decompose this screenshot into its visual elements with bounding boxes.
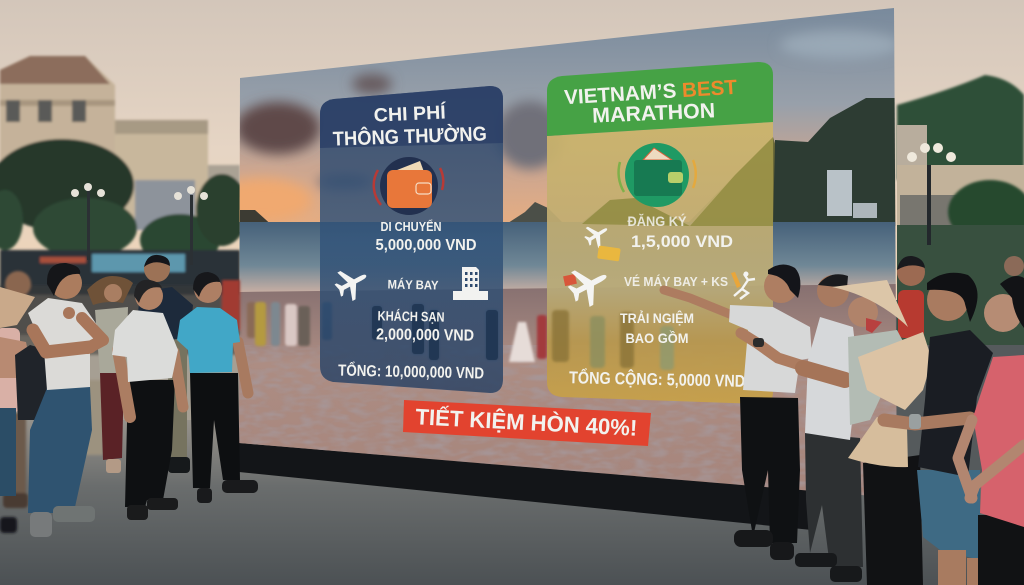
panel header green	[547, 62, 773, 136]
panel body yellow	[547, 122, 773, 404]
text: total marathon: TỔNG CỘNG: 5,0000 VND	[569, 368, 745, 391]
text: dang ky fee	[628, 214, 733, 251]
sky	[0, 0, 1024, 300]
panel: standard cost	[320, 86, 503, 393]
heading: vietnam's best marathon: VIETNAM’S BEST	[564, 76, 738, 109]
icon: plane with tag	[562, 258, 616, 312]
person: man in white shirt	[112, 280, 183, 520]
LED screen	[239, 8, 896, 496]
icon: plane over ticket	[581, 219, 621, 261]
panel header band	[320, 86, 503, 148]
person: man in red shirt behind	[897, 256, 1024, 338]
background: buildings and trees on the left	[0, 56, 248, 425]
icon: plane	[330, 261, 374, 305]
crowd: people on the left	[0, 255, 258, 537]
text: flight and hotel: VÉ MÁY BAY + KS	[624, 274, 728, 289]
crowd: people on the right	[664, 256, 1024, 585]
background: lamp posts left	[71, 183, 208, 265]
pavement	[0, 420, 1024, 585]
heading: chi phi thong thuong	[332, 101, 487, 151]
icon: hotel	[453, 267, 488, 300]
person: woman in straw hat, back	[87, 276, 133, 473]
person: woman with conical hat	[832, 280, 923, 585]
text: di chuyen cost: DI CHUYỂN	[380, 219, 442, 234]
figures through yellow panel	[552, 310, 674, 370]
panel: best marathon	[547, 62, 773, 404]
person: woman on far left	[0, 287, 35, 496]
screen mountains	[240, 210, 268, 222]
screen sea and beach	[235, 222, 905, 294]
person: man in white tee and jeans	[15, 263, 103, 537]
text: trai nghiem bao gom	[620, 311, 694, 346]
text: di chuyen cost: 5,000,000 VND	[376, 237, 476, 254]
icon: straw bag	[848, 417, 908, 467]
icon: green wallet	[619, 143, 696, 207]
icon: orange wallet	[374, 157, 443, 215]
person: man in black tee	[884, 273, 993, 585]
person: woman in pink shirt	[958, 276, 1024, 585]
heading: chi phi thong thuong: CHI PHÍ	[373, 101, 447, 127]
text: may bay: MÁY BAY	[387, 277, 439, 292]
panel body navy	[320, 86, 503, 393]
heading: vietnam's best marathon: MARATHON	[592, 99, 716, 128]
icon: conical hat held	[858, 332, 932, 410]
text: dang ky fee: 1,5,000 VND	[631, 232, 733, 251]
text: dang ky fee: ĐĂNG KÝ	[628, 214, 686, 229]
heading: chi phi thong thuong: THÔNG THƯỜNG	[332, 121, 487, 151]
text: trai nghiem bao gom: TRẢI NGIỆM	[620, 311, 694, 326]
mountain through yellow panel	[582, 137, 773, 226]
background: hill, buildings and lamp on the right	[897, 75, 1024, 345]
figures through navy panel	[372, 304, 498, 360]
screen clouds	[212, 31, 900, 222]
text: total standard: TỔNG: 10,000,000 VND	[338, 360, 484, 383]
heading: vietnam's best marathon	[564, 76, 738, 128]
person: man in white polo	[795, 274, 863, 582]
person: man in blue polo	[177, 272, 258, 503]
screen beach figures	[247, 302, 547, 362]
text: khach san cost: 2,000,000 VND	[376, 326, 474, 345]
text: khach san cost: KHÁCH SẠN	[377, 308, 445, 325]
callout: savings banner: TIẾT KIỆM HÒN 40%!	[415, 404, 638, 441]
person: background crowd	[0, 271, 240, 533]
text: khach san cost	[376, 308, 474, 345]
person: man in navy jacket, back	[135, 255, 193, 473]
text: di chuyen cost	[376, 219, 476, 254]
screen base	[239, 443, 812, 530]
person: pointing presenter	[664, 264, 812, 560]
text: trai nghiem bao gom: BAO GỒM	[626, 331, 688, 346]
icon: runner	[731, 272, 755, 299]
